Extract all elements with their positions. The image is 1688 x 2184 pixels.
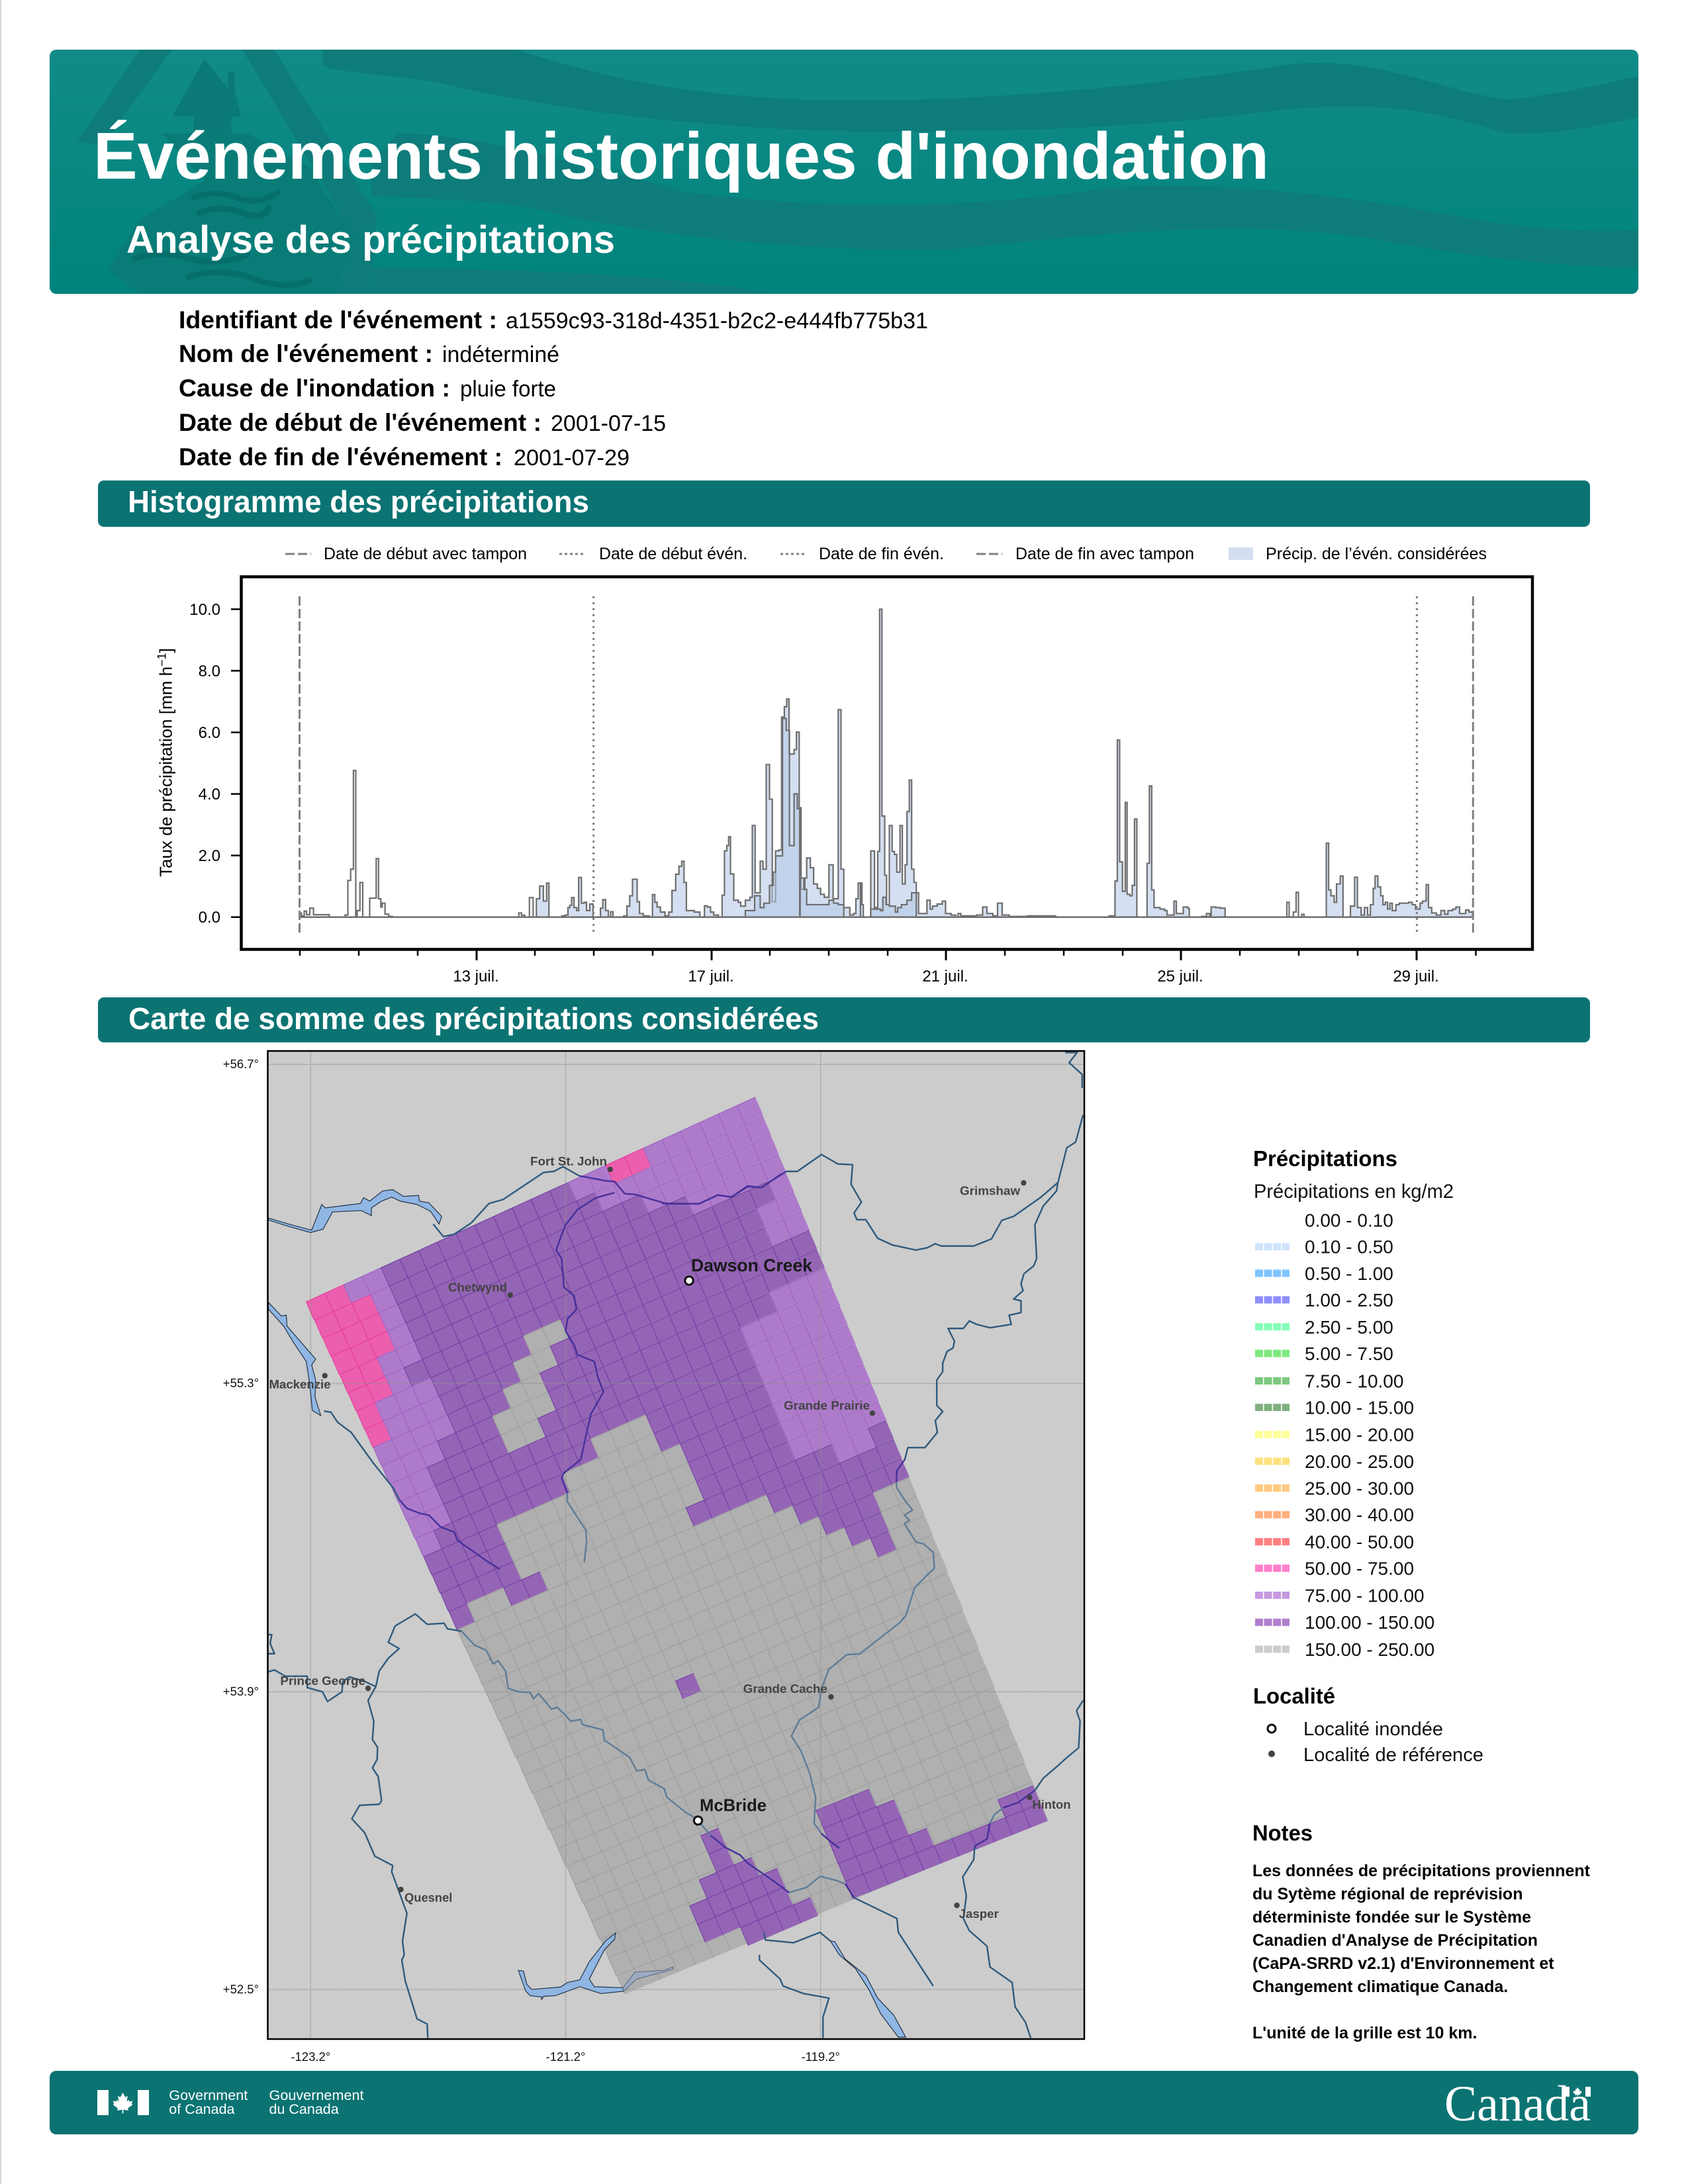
rivers and lakes [269,1052,1083,2038]
legend: event start date: Date de début évén. [599,545,747,563]
government of Canada signature: Gouvernement [269,2087,364,2103]
event name: indéterminé [442,342,559,367]
precipitation grid cells [306,1097,1048,1994]
latitude labels: +55.3° [223,1376,259,1390]
event id [179,306,928,334]
legend class labels: 0.10 - 0.50 [1305,1237,1393,1257]
buffered end line [1472,596,1474,933]
end date: Date de fin de l'événement : [179,443,502,471]
legend class labels: 15.00 - 20.00 [1305,1424,1414,1445]
section heading: histogram: Histogramme des précipitations [128,484,589,519]
event id: Identifiant de l'événement : [179,306,497,334]
notes body [1252,1862,1591,2042]
flooded locality: McBride [694,1796,767,1825]
y axis: 0.0 [199,909,220,927]
locality: Quesnel: Quesnel [404,1891,452,1905]
longitude labels: -123.2° [291,2050,330,2064]
notes body: (CaPA-SRRD v2.1) d'Environnement et [1252,1954,1554,1973]
legend subtitle: Précipitations en kg/m2 [1254,1181,1454,1203]
map frame [267,1051,1084,2039]
flood cause: pluie forte [460,377,556,402]
notes body: déterministe fondée sur le Système [1252,1908,1531,1927]
locality: Jasper: Jasper [959,1907,999,1921]
notes body: Changement climatique Canada. [1252,1978,1508,1996]
footer band [50,2071,1638,2134]
government of Canada signature: du Canada [269,2101,339,2117]
event name [179,340,559,367]
legend class labels: 75.00 - 100.00 [1305,1585,1425,1606]
y axis: 10.0 [189,601,220,619]
legend class labels: 25.00 - 30.00 [1305,1479,1414,1498]
locality: Quesnel [398,1887,452,1905]
latitude labels [223,1057,259,1996]
event name: Nom de l'événement : [179,340,433,367]
section heading: map: Carte de somme des précipitations considérées [128,1001,819,1036]
y axis: 4.0 [199,786,220,803]
latitude labels: +52.5° [223,1982,259,1996]
flooded locality key: Localité inondée [1303,1719,1443,1740]
x axis: 17 juil. [688,968,734,985]
reference locality key: Localité de référence [1303,1745,1483,1766]
locality: Grande Prairie: Grande Prairie [784,1398,870,1412]
precipitation series, right half [861,610,1473,917]
x axis: 29 juil. [1393,968,1439,985]
legend swatches [1255,1247,1289,1649]
locality: Grimshaw: Grimshaw [960,1184,1021,1198]
map legend: precipitation classes [1253,1146,1454,1660]
legend class labels: 7.50 - 10.00 [1305,1371,1403,1391]
legend class labels: 50.00 - 75.00 [1305,1559,1414,1579]
title: Événements historiques d'inondation [93,119,1269,193]
legend class labels [1305,1210,1434,1660]
subtitle: Analyse des précipitations [126,218,615,261]
flooded locality: Dawson Creek [685,1255,812,1285]
buffered start line [299,596,301,933]
event end line [1416,596,1418,933]
y axis [156,601,241,927]
y axis: 8.0 [199,662,220,680]
precipitation series, left half [300,699,861,917]
locality: Jasper [954,1903,999,1921]
notes heading: Notes [1252,1821,1313,1845]
government of Canada signature [169,2087,364,2117]
locality: Fort St. John: Fort St. John [530,1154,607,1168]
event id: a1559c93-318d-4351-b2c2-e444fb775b31 [506,308,928,334]
legend class labels: 0.00 - 0.10 [1305,1210,1393,1231]
notes body: Canadien d'Analyse de Précipitation [1252,1931,1538,1950]
locality: Hinton: Hinton [1032,1797,1070,1811]
legend class labels: 5.00 - 7.50 [1305,1343,1393,1364]
notes [1252,1821,1591,2042]
legend class labels: 100.00 - 150.00 [1305,1612,1434,1633]
legend: considered precipitation: Précip. de l’évén. considérées [1266,545,1487,563]
y axis: 6.0 [199,724,220,742]
flooded locality: McBride: McBride [700,1796,767,1815]
chart legend [285,545,1487,563]
legend class labels: 10.00 - 15.00 [1305,1398,1414,1418]
legend class labels: 20.00 - 25.00 [1305,1451,1414,1472]
longitude labels: -119.2° [801,2050,840,2064]
x axis: 21 juil. [922,968,968,985]
start date: 2001-07-15 [551,411,666,436]
x axis: 13 juil. [453,968,499,985]
longitude labels [291,2050,840,2064]
section heading: map [98,997,1590,1042]
legend class labels: 40.00 - 50.00 [1305,1531,1414,1553]
legend: buffered start date: Date de début avec tampon [324,545,527,563]
header watermark: waves and flood logo [77,50,1647,294]
flood cause: Cause de l'inondation : [179,375,450,402]
latitude labels: +53.9° [223,1684,259,1698]
legend class labels: 150.00 - 250.00 [1305,1639,1434,1660]
locality heading: Localité [1253,1684,1335,1708]
event metadata block [179,306,928,471]
precipitation histogram chart [156,577,1532,985]
event start line [592,596,594,933]
government of Canada signature: of Canada [169,2101,235,2117]
legend class labels: 0.50 - 1.00 [1305,1263,1393,1284]
map legend: localities [1253,1684,1483,1766]
legend: event end date: Date de fin évén. [819,545,944,563]
legend class labels: 1.00 - 2.50 [1305,1290,1393,1310]
x axis: 25 juil. [1157,968,1203,985]
legend heading: Précipitations [1253,1146,1397,1171]
Canada wordmark: Canada [1444,2076,1591,2132]
notes body: Les données de précipitations proviennent [1252,1862,1591,1880]
precipitation map [223,1051,1084,2064]
end date: 2001-07-29 [514,445,630,471]
locality: Grande Cache: Grande Cache [743,1682,827,1696]
x axis [300,950,1476,985]
legend class labels: 2.50 - 5.00 [1305,1317,1393,1338]
notes body: L'unité de la grille est 10 km. [1252,2024,1477,2042]
start date: Date de début de l'événement : [179,409,541,436]
government of Canada signature: Government [169,2087,248,2103]
longitude labels: -121.2° [546,2050,585,2064]
latitude labels: +56.7° [223,1057,259,1071]
y axis title: ] [156,648,176,653]
y axis title: Taux de précipitation [mm h [156,666,176,877]
locality: Mackenzie: Mackenzie [269,1377,331,1391]
y axis: 2.0 [199,847,220,865]
zero baseline [299,916,1473,918]
latitude and longitude graticule [268,1052,1084,2038]
icon: Canadian flag symbol [97,2090,149,2115]
header banner [50,50,1647,294]
section heading: histogram [98,480,1590,527]
legend class labels: 30.00 - 40.00 [1305,1505,1414,1525]
flooded locality: Dawson Creek: Dawson Creek [691,1255,812,1275]
notes body: du Sytème régional de reprévision [1252,1885,1523,1903]
legend: buffered end date: Date de fin avec tampon [1015,545,1194,563]
locality: Prince George: Prince George [280,1674,365,1688]
locality: Chetwynd: Chetwynd [448,1281,507,1295]
y axis title: −1 [156,653,169,666]
